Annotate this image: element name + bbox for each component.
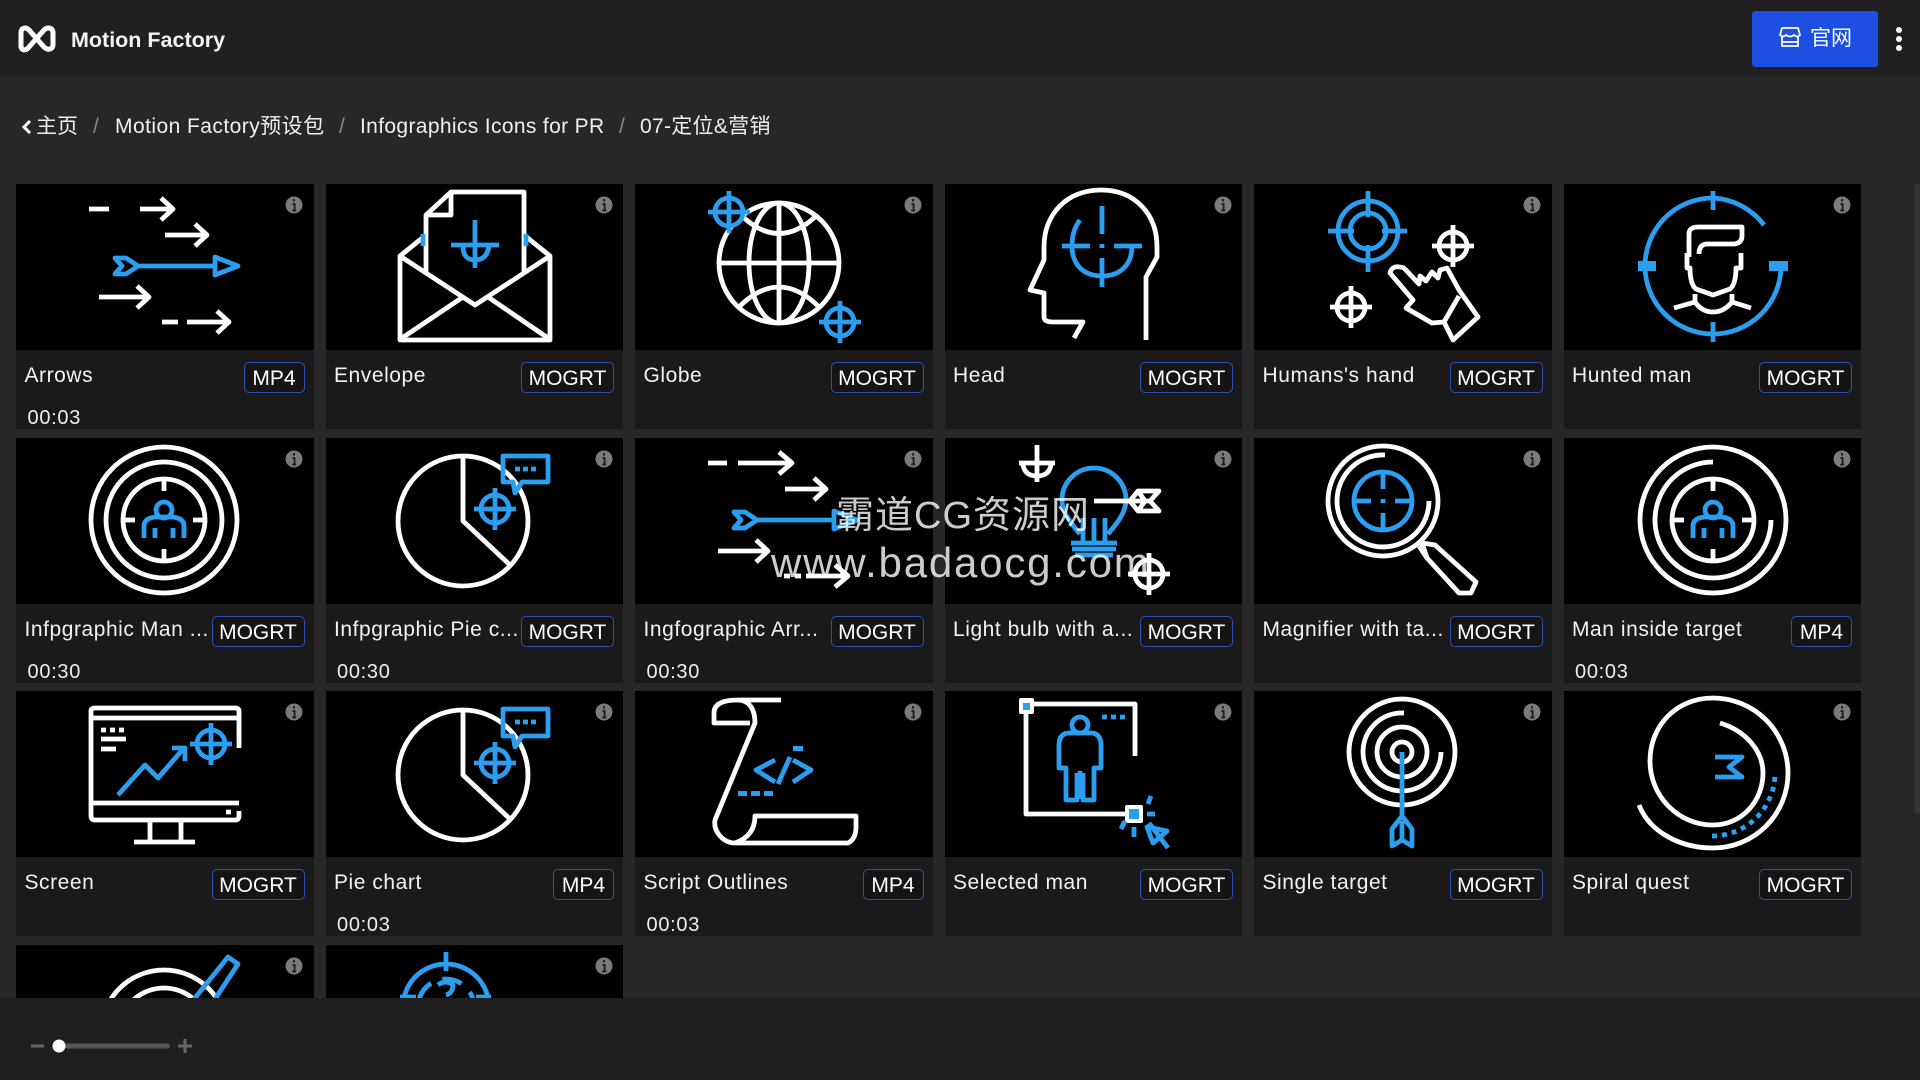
icon: man inside rings bbox=[16, 438, 314, 604]
format badge: MOGRT bbox=[838, 367, 916, 390]
card: Hunted man bbox=[1564, 184, 1861, 429]
zoom slider bbox=[31, 1039, 192, 1053]
breadcrumb: current folder: 07-定位&营销 bbox=[640, 115, 771, 138]
icon: globe bbox=[635, 184, 932, 350]
card: Infpgraphic Pie bbox=[326, 438, 623, 683]
duration: 00:30 bbox=[337, 661, 391, 683]
footer bar bbox=[0, 998, 1920, 1080]
title: Infpgraphic Pie c... bbox=[334, 618, 519, 641]
card: Screen bbox=[16, 691, 314, 936]
icon: back chevron bbox=[22, 120, 31, 134]
format badge: MOGRT bbox=[1767, 874, 1844, 897]
format badge bbox=[1450, 362, 1542, 393]
format badge: MOGRT bbox=[838, 621, 916, 644]
format badge bbox=[212, 869, 304, 900]
format badge bbox=[521, 362, 614, 393]
icon: target with pencil bbox=[16, 945, 314, 998]
format badge bbox=[244, 362, 304, 393]
title: Ingfographic Arr... bbox=[644, 618, 819, 641]
watermark: url: www.badaocg.com bbox=[771, 539, 1151, 586]
icon: spiral quest bbox=[1564, 691, 1861, 857]
brand name: Motion Factory bbox=[71, 28, 225, 52]
format badge bbox=[1791, 616, 1852, 647]
card: partial target with pencil bbox=[16, 945, 314, 998]
title: Pie chart bbox=[334, 871, 422, 894]
card: Spiral quest bbox=[1564, 691, 1861, 936]
breadcrumb separator: / bbox=[339, 115, 345, 138]
watermark bbox=[770, 495, 1151, 586]
icon: screen with chart bbox=[16, 691, 314, 857]
duration: 00:03 bbox=[646, 914, 700, 936]
icon: light bulb with arrow bbox=[944, 438, 1242, 604]
icon: envelope bbox=[326, 184, 623, 350]
card: partial money target bbox=[326, 945, 623, 998]
card: Head bbox=[944, 184, 1242, 429]
card: Arrows bbox=[16, 184, 314, 429]
format badge bbox=[830, 362, 924, 393]
title: Magnifier with ta... bbox=[1262, 618, 1444, 641]
title: Script Outlines bbox=[644, 871, 788, 894]
format badge: MOGRT bbox=[1148, 874, 1225, 897]
title: Man inside target bbox=[1572, 618, 1742, 641]
format badge: MOGRT bbox=[1767, 367, 1844, 390]
card: Envelope bbox=[326, 184, 623, 429]
duration: 00:03 bbox=[28, 407, 81, 429]
card: Magnifier bbox=[1254, 438, 1552, 683]
card: Infpgraphic Man bbox=[16, 438, 314, 683]
format badge bbox=[1140, 362, 1233, 393]
card: Script Outlines bbox=[635, 691, 932, 936]
format badge bbox=[1759, 362, 1852, 393]
card: Light bulb bbox=[944, 438, 1242, 683]
icon: single target bbox=[1254, 691, 1552, 857]
format badge: MOGRT bbox=[1148, 367, 1225, 390]
icon: Motion Factory logo bbox=[18, 26, 56, 52]
format badge bbox=[212, 616, 304, 647]
card: Single target bbox=[1254, 691, 1552, 936]
breadcrumb separator: / bbox=[619, 115, 625, 138]
format badge bbox=[1759, 869, 1852, 900]
format badge: MOGRT bbox=[529, 367, 606, 390]
title: Selected man bbox=[953, 871, 1088, 894]
header bar bbox=[0, 0, 1920, 76]
duration: 00:30 bbox=[28, 661, 81, 683]
format badge bbox=[862, 869, 924, 900]
title: Screen bbox=[24, 871, 94, 894]
icon: hand with targets bbox=[1254, 184, 1552, 350]
card: Ingfographic Arrows bbox=[635, 438, 932, 683]
title: Humans's hand bbox=[1262, 364, 1415, 387]
icon: script scroll bbox=[635, 691, 932, 857]
duration: 00:03 bbox=[1575, 661, 1629, 683]
title: Spiral quest bbox=[1572, 871, 1690, 894]
title: Head bbox=[953, 364, 1005, 387]
title: Light bulb with a... bbox=[953, 618, 1133, 641]
title: Single target bbox=[1262, 871, 1388, 894]
breadcrumb: infographics icons: Infographics Icons for PR bbox=[360, 115, 605, 138]
format badge bbox=[1140, 616, 1233, 647]
icon: selected man bbox=[944, 691, 1242, 857]
icon: pie chart bbox=[326, 691, 623, 857]
icon: store bbox=[1779, 27, 1801, 47]
format badge: MOGRT bbox=[219, 621, 297, 644]
icon: man in crosshair bbox=[1564, 184, 1861, 350]
breadcrumb: preset pack: Motion Factory预设包 bbox=[115, 115, 325, 138]
icon: pie with target bbox=[326, 438, 623, 604]
card: Selected man bbox=[944, 691, 1242, 936]
icon: dollar target bbox=[326, 945, 623, 998]
card: Pie chart bbox=[326, 691, 623, 936]
format badge: MOGRT bbox=[1148, 621, 1225, 644]
format badge: MP4 bbox=[1800, 621, 1843, 644]
icon: man inside open rings bbox=[1564, 438, 1861, 604]
title: Infpgraphic Man ... bbox=[24, 618, 209, 641]
format badge: MP4 bbox=[871, 874, 915, 897]
format badge: MOGRT bbox=[529, 621, 606, 644]
card: Humans's hand bbox=[1254, 184, 1552, 429]
format badge: MOGRT bbox=[1457, 874, 1535, 897]
breadcrumb: home: 主页 bbox=[36, 115, 78, 138]
duration: 00:03 bbox=[337, 914, 391, 936]
format badge bbox=[830, 616, 924, 647]
title: Globe bbox=[644, 364, 702, 387]
button: official site bbox=[1752, 11, 1878, 67]
title: Arrows bbox=[24, 364, 93, 387]
card: Man inside target bbox=[1564, 438, 1861, 683]
button label: 官网 bbox=[1810, 27, 1852, 50]
format badge bbox=[1140, 869, 1233, 900]
icon: arrows variant bbox=[635, 438, 932, 604]
icon: arrows bbox=[16, 184, 314, 350]
format badge: MP4 bbox=[252, 367, 296, 390]
duration: 00:30 bbox=[646, 661, 700, 683]
card: Globe bbox=[635, 184, 932, 429]
scrollbar bbox=[1915, 184, 1920, 813]
format badge: MOGRT bbox=[219, 874, 297, 897]
format badge: MOGRT bbox=[1457, 367, 1535, 390]
breadcrumb separator: / bbox=[93, 115, 99, 138]
title: Envelope bbox=[334, 364, 426, 387]
format badge bbox=[1450, 869, 1542, 900]
icon: magnifier with target bbox=[1254, 438, 1552, 604]
format badge: MOGRT bbox=[1457, 621, 1535, 644]
breadcrumb bbox=[22, 115, 771, 138]
format badge bbox=[553, 869, 614, 900]
format badge: MP4 bbox=[562, 874, 605, 897]
watermark: site name: 霸道CG资源网 bbox=[836, 495, 1090, 537]
title: Hunted man bbox=[1572, 364, 1692, 387]
icon: more menu bbox=[1896, 27, 1902, 51]
format badge bbox=[521, 616, 614, 647]
format badge bbox=[1450, 616, 1542, 647]
icon: head with target bbox=[944, 184, 1242, 350]
